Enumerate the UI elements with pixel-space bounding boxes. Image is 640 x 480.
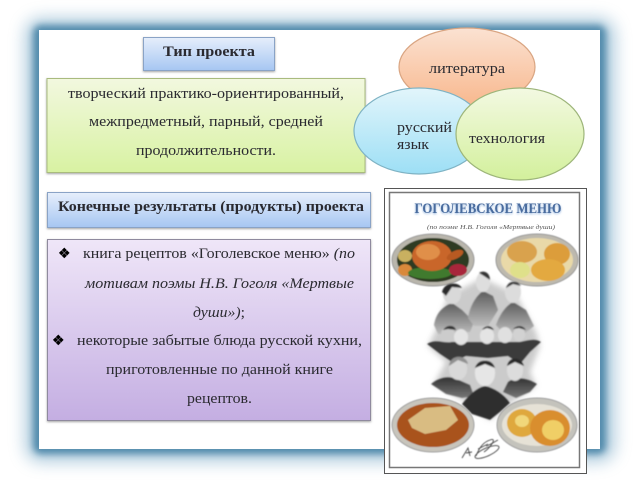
panel: results list: рецептов. <box>187 391 252 407</box>
bubble: russian language: язык <box>397 137 430 153</box>
middle row coats <box>427 340 541 364</box>
panel: results list: книга рецептов «Гоголевское меню» (по <box>83 246 356 262</box>
heading: final results <box>48 192 370 228</box>
panel: project type description: творческий практико-ориентированный, <box>68 86 344 102</box>
panel: results list: приготовленные по данной книге <box>106 362 333 378</box>
poster: Gogol menu <box>384 188 586 474</box>
panel: project type description: продолжительности. <box>136 143 276 159</box>
illustration: group of Gogol characters <box>427 272 541 420</box>
heading: final results: Конечные результаты (продукты) проекта <box>58 199 365 215</box>
plate: roast turkey <box>392 234 474 286</box>
bubble: technology <box>456 88 584 180</box>
front row coats <box>431 377 474 398</box>
bullet 1: ❖ <box>58 246 71 262</box>
panel: results list: мотивам поэмы Н.В. Гоголя «Мертвые <box>84 276 354 292</box>
bubble: literature <box>399 28 535 106</box>
panel: project type description <box>47 78 365 172</box>
front row heads <box>449 358 467 380</box>
panel: results list: некоторые забытые блюда русской кухни, <box>77 333 362 349</box>
back row coats <box>434 303 474 334</box>
poster title: ГОГОЛЕВСКОЕ МЕНЮ <box>414 201 562 217</box>
plate: buns <box>497 398 577 452</box>
plate: pies <box>496 234 578 286</box>
poster title: ГОГОЛЕВСКОЕ МЕНЮ <box>414 202 562 218</box>
icon: Gogol signature <box>462 439 501 461</box>
panel: project type description: межпредметный, парный, средней <box>89 114 323 130</box>
bubble: technology: технология <box>469 131 545 147</box>
bubble: russian language: русский <box>397 120 452 136</box>
back row heads <box>443 284 461 304</box>
bubble: literature: литература <box>429 61 505 77</box>
soft grey backdrop of the group <box>428 278 540 420</box>
bubble: russian language <box>354 88 484 174</box>
heading: project type <box>144 38 274 70</box>
panel: results list <box>48 240 370 420</box>
poster subtitle: (по поэме Н.В. Гоголя «Мертвые души) <box>427 224 555 231</box>
panel: results list: души»); <box>193 305 245 321</box>
bullet 2: ❖ <box>52 333 65 349</box>
plate: soup with dumplings <box>392 398 474 452</box>
heading: project type: Тип проекта <box>163 44 256 60</box>
middle row heads <box>441 327 455 341</box>
